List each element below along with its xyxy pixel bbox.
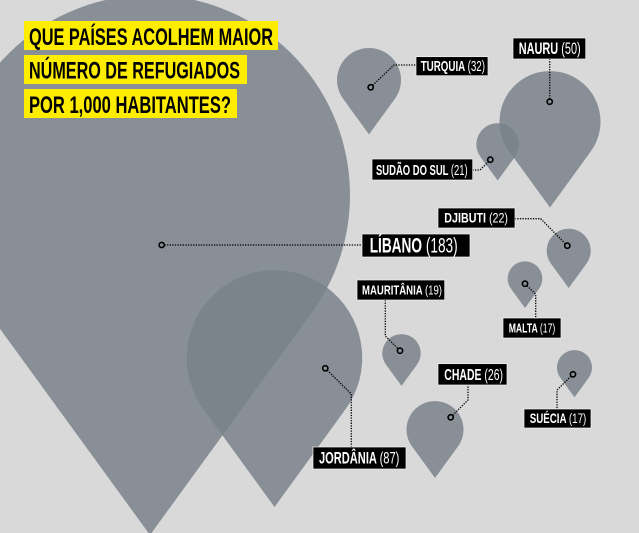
pin: Mauritânia: [382, 334, 421, 386]
callout: Líbano: [159, 233, 470, 258]
callout: Malta: [503, 281, 561, 338]
callout: Djibuti: [438, 208, 570, 248]
pin: Djibuti: [547, 229, 591, 288]
title: [24, 21, 278, 119]
callout: Chade: CHADE (26): [444, 367, 503, 384]
pin: Suécia: [557, 350, 592, 397]
callout: Chade: [438, 364, 507, 420]
pin: Nauru: [500, 71, 600, 208]
callout: Jordânia: [313, 366, 406, 469]
pin: Malta: [508, 261, 542, 308]
callout: Nauru: NAURU (50): [519, 40, 581, 58]
callout: Jordânia: JORDÂNIA (87): [319, 448, 399, 467]
callout: Sudão do Sul: SUDÃO DO SUL (21): [376, 161, 468, 179]
pin: Sudão do Sul: [476, 123, 519, 180]
title: NÚMERO DE REFUGIADOS: [29, 56, 240, 84]
pin: Turquia: [337, 48, 401, 134]
callout: Djibuti: DJIBUTI (22): [444, 210, 508, 226]
callout: Suécia: SUÉCIA (17): [530, 411, 586, 426]
callout: Malta: MALTA (17): [509, 321, 555, 336]
title: QUE PAÍSES ACOLHEM MAIOR: [29, 23, 273, 51]
callout: Turquia: [368, 57, 488, 90]
pin: Líbano: [0, 0, 350, 533]
callout: Nauru: [513, 38, 586, 104]
callout: Suécia: [524, 372, 591, 428]
callout: Mauritânia: [357, 280, 445, 353]
pin: Chade: [406, 401, 463, 478]
callout: Mauritânia: MAURITÂNIA (19): [362, 282, 442, 297]
title: POR 1,000 HABITANTES?: [29, 92, 231, 119]
pin: Jordânia: [187, 270, 362, 507]
callout: Líbano: LÍBANO (183): [370, 233, 458, 258]
callout: Turquia: TURQUIA (32): [421, 59, 485, 75]
